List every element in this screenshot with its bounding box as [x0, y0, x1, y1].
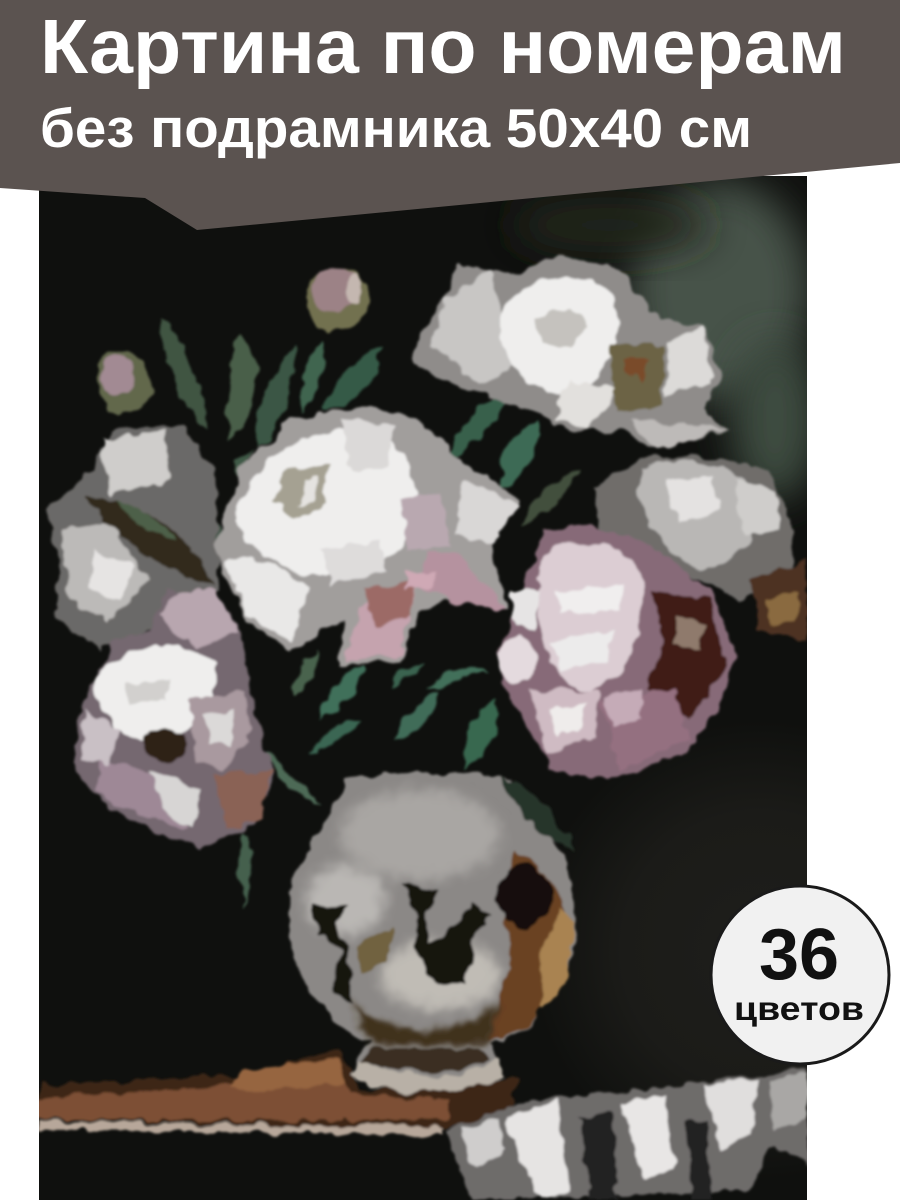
- table: [39, 1048, 520, 1135]
- title: Картина по номерам: [40, 4, 846, 90]
- badge: 36 colours: [711, 886, 889, 1064]
- badge number: 36: [759, 915, 839, 995]
- peony: centre white and pink: [215, 405, 520, 665]
- background shading: [514, 176, 807, 1086]
- peony: lower left pink: [70, 590, 272, 850]
- painting: peonies in a vase: [39, 176, 807, 1200]
- badge label: цветов: [734, 990, 864, 1027]
- vase: [288, 772, 576, 1092]
- subtitle: без подрамника 50х40 см: [40, 97, 752, 159]
- peony: left grey: [45, 425, 220, 650]
- peony: right grey: [590, 455, 807, 640]
- leaves: [160, 318, 660, 905]
- cloth: [445, 1068, 807, 1200]
- peony: right pink: [498, 525, 735, 780]
- header banner: [0, 0, 900, 230]
- buds: [97, 268, 370, 415]
- peony: top right white: [415, 255, 728, 450]
